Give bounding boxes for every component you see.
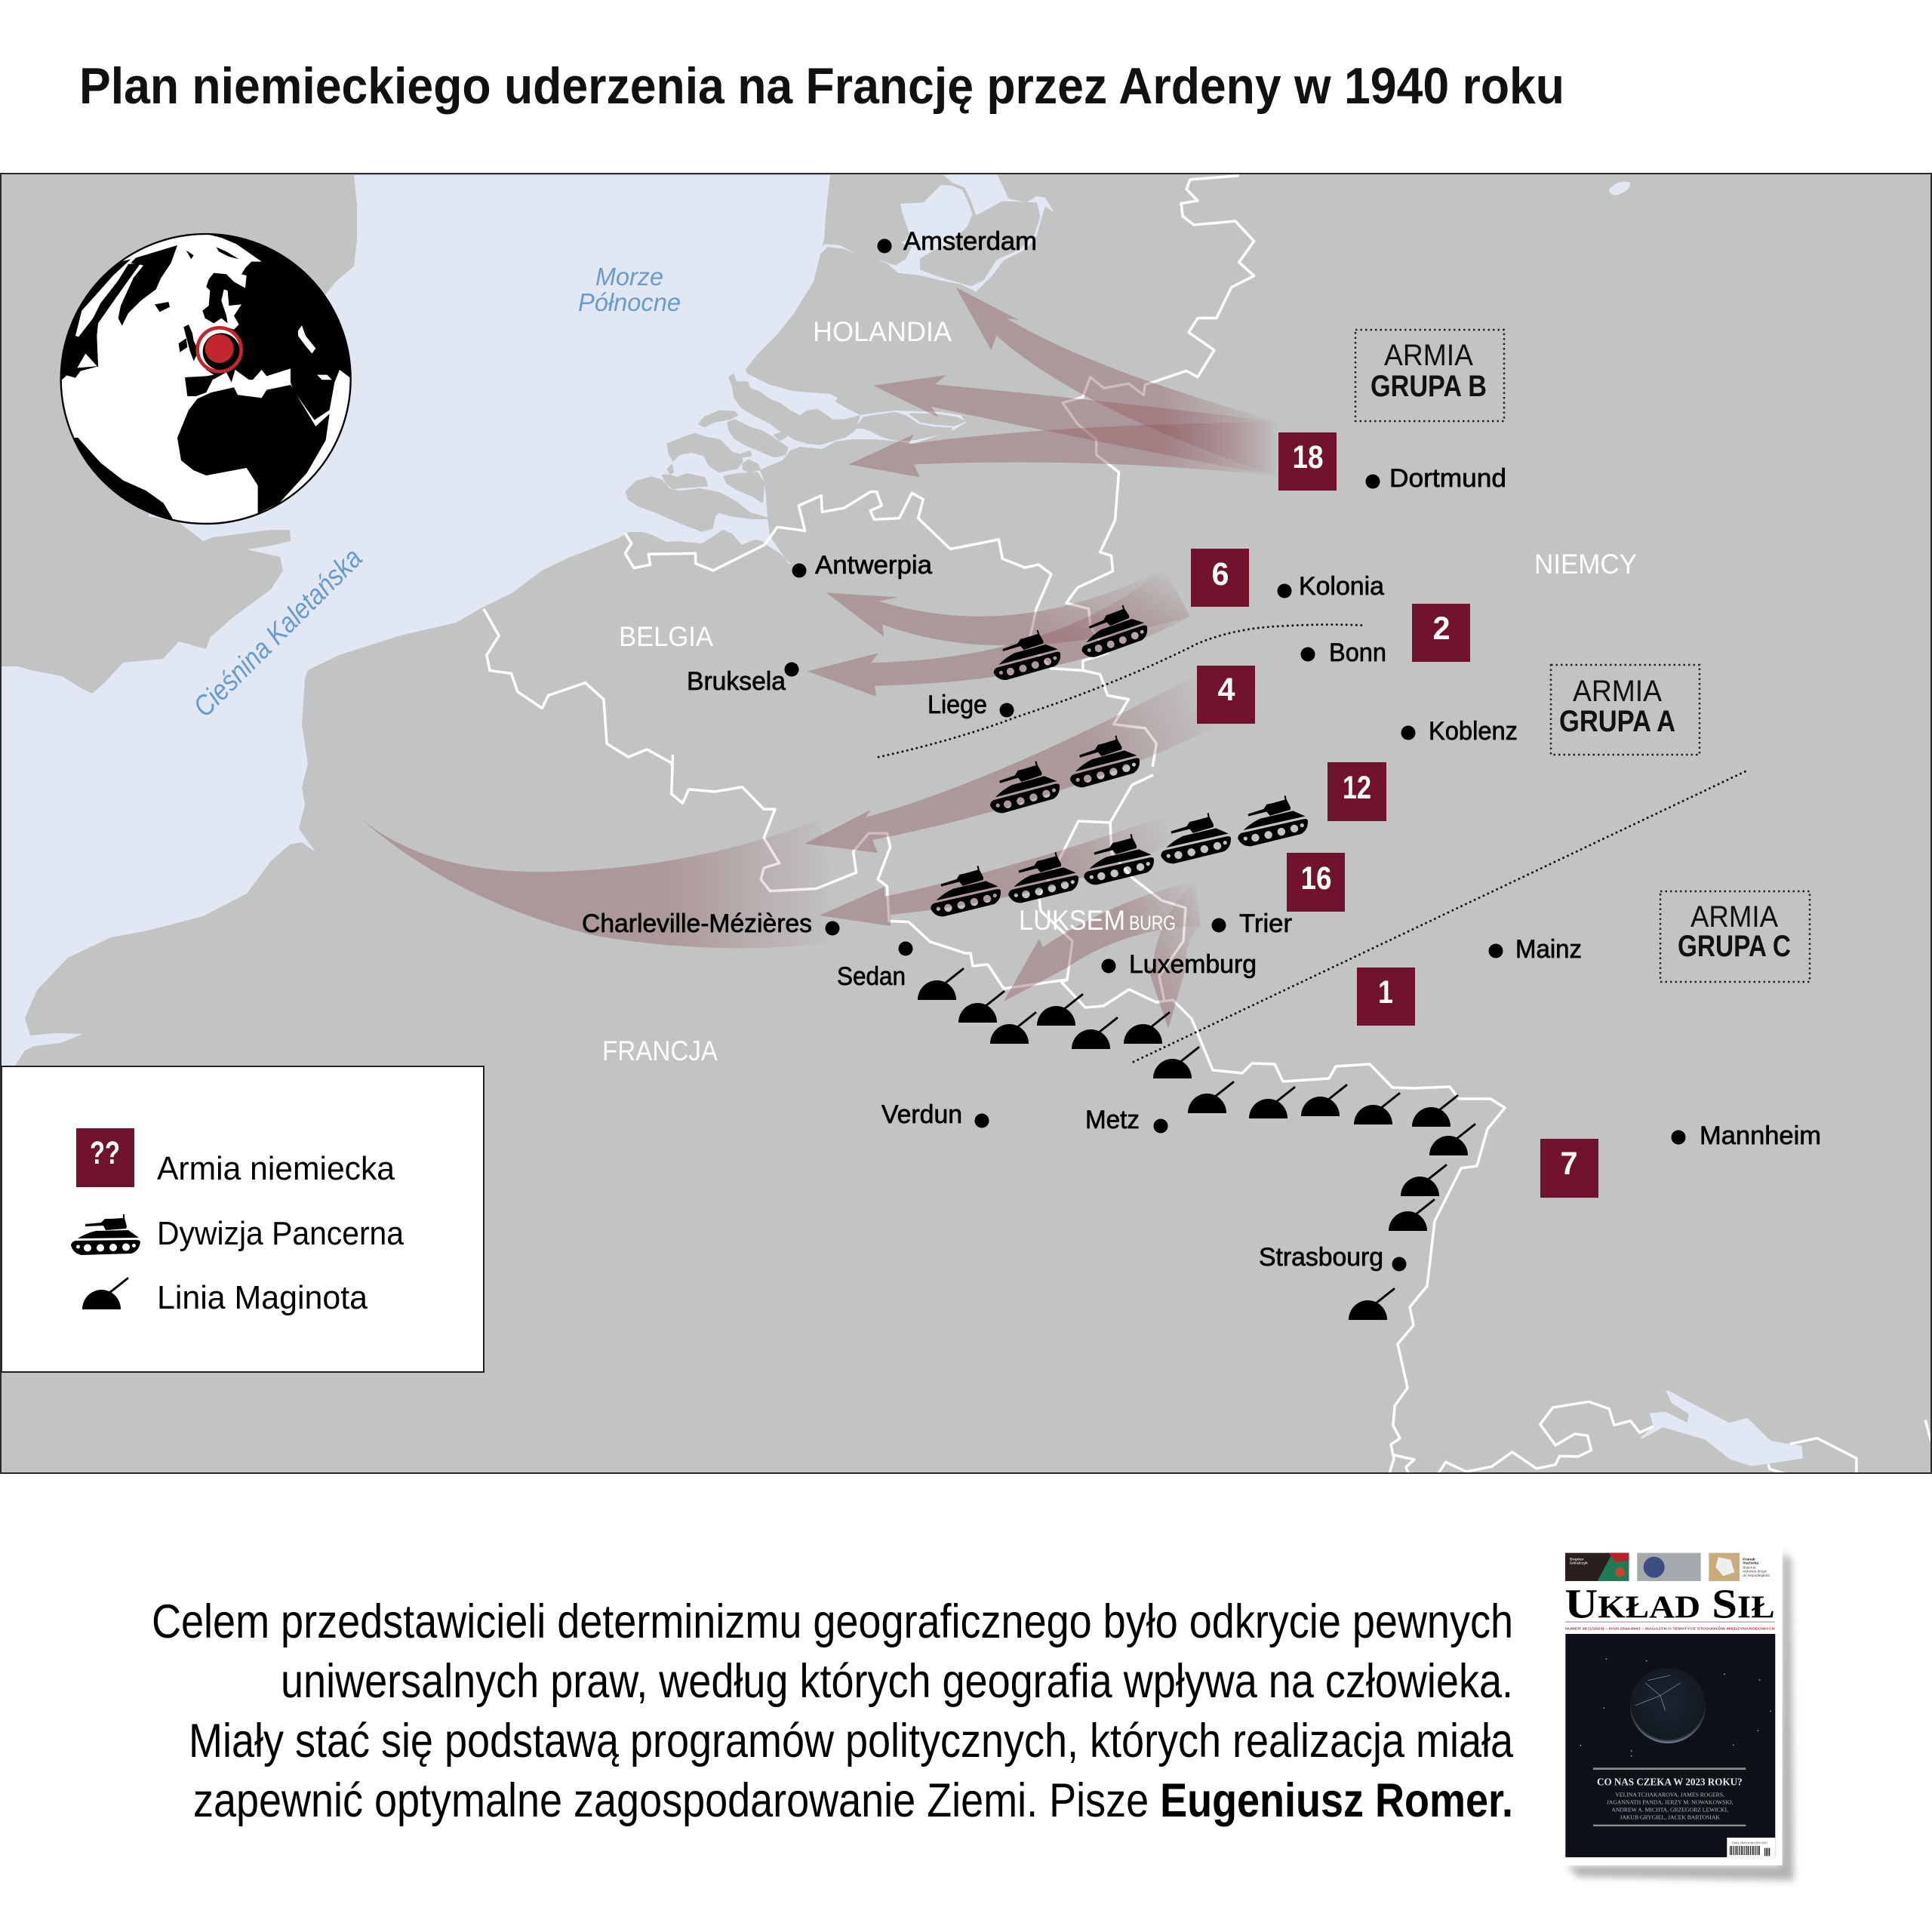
army group B label (1355, 330, 1504, 421)
arrow: 12th army (820, 822, 1161, 926)
city markers and labels: Charleville-Mézières (582, 909, 812, 938)
army number squares: 7 (1561, 1146, 1577, 1182)
army group C label: ARMIA (1690, 900, 1778, 934)
arrow: 16th army south (1147, 894, 1200, 1028)
arrows: 18th army (848, 288, 1280, 477)
sea labels: Cieśnina Kaletańska (188, 543, 368, 723)
cover issue line: NUMER 38 (1/2023) – ISSN 2544-8943 – MAGAZYN O TEMATYCE STOSUNKÓW MIĘDZYNARODOWYCH (1565, 1625, 1775, 1631)
city markers and labels: Sedan (837, 962, 906, 991)
army group B label: GRUPA B (1371, 370, 1487, 403)
sea labels: Morze (595, 263, 663, 291)
army group C label (1660, 891, 1810, 982)
cover image (1565, 1634, 1775, 1857)
legend labels (157, 1150, 404, 1316)
cover masthead: UKŁAD SIŁ (1564, 1580, 1775, 1626)
city markers and labels: Dortmund (1389, 464, 1506, 493)
city markers and labels: Luxemburg (1129, 950, 1257, 979)
dotted line: army group A/C boundary (1134, 771, 1746, 1062)
arrows: 6th army (808, 568, 1190, 697)
city markers and labels: Trier (1239, 909, 1292, 938)
tanks (924, 600, 1311, 918)
army number squares: 1 (1378, 974, 1393, 1011)
sea labels: Północne (578, 288, 681, 316)
cover top teasers: Bogdan (1570, 1557, 1584, 1561)
dotted line: army group A/B boundary (878, 625, 1364, 757)
cover top teasers: do niepodległości (1743, 1574, 1770, 1577)
country labels: LUKSEM (1019, 905, 1125, 936)
cover page (1560, 1546, 1783, 1866)
legend: army square: ?? (90, 1135, 120, 1171)
body text: zapewnić optymalne zagospodarowanie Ziemi. Pisze Eugeniusz Romer. (193, 1774, 1513, 1827)
army number squares (1191, 432, 1598, 1198)
army group A label (1551, 665, 1700, 755)
cover top teasers: Franak (1743, 1557, 1755, 1561)
city markers and labels: Strasbourg (1259, 1243, 1383, 1272)
title: Plan niemieckiego uderzenia na Francję przez Ardeny w 1940 roku (79, 57, 1564, 115)
cover image: JAKUB GRYGIEL, JACEK BARTOSIAK (1620, 1814, 1720, 1820)
cover image: JAGANNATH PANDA, JERZY M. NOWAKOWSKI, (1607, 1799, 1734, 1806)
panel: map (0, 174, 1932, 1474)
water: Amsterdam lake and inland waters (815, 175, 1054, 292)
Maginot Line domes (918, 969, 1475, 1320)
sea labels (188, 263, 681, 723)
arrow: 16th army west (1004, 881, 1201, 1001)
city markers and labels: Amsterdam (903, 227, 1037, 256)
arrow: long sweep to the Channel (353, 812, 844, 948)
body text: Miały stać się podstawą programów politycznych, których realizacja miała (189, 1715, 1514, 1767)
city markers and labels: Liege (928, 691, 987, 719)
army number squares: 6 (1212, 556, 1229, 592)
cover image: CO NAS CZEKA W 2023 ROKU? (1597, 1776, 1743, 1787)
city markers and labels: Bruksela (687, 667, 786, 696)
city markers and labels: Metz (1085, 1106, 1140, 1134)
cover shadow (1567, 1552, 1794, 1881)
body text: Celem przedstawicieli determinizmu geograficznego było odkrycie pewnych (152, 1595, 1513, 1648)
legend: army square (76, 1128, 134, 1187)
country labels (602, 316, 1637, 1066)
city markers and labels (582, 227, 1821, 1272)
borders (484, 176, 1932, 1474)
body text (152, 1595, 1514, 1827)
map frame (1, 174, 1931, 1473)
army group B label: ARMIA (1384, 339, 1473, 372)
cover top teasers: Białoruś (1743, 1565, 1756, 1569)
cover barcode: Cena 20zł (w tym 8% VAT) (1732, 1841, 1768, 1844)
magazine cover (1560, 1546, 1794, 1881)
country labels: BELGIA (619, 621, 713, 652)
delta islands (626, 375, 964, 531)
cover barcode (1727, 1838, 1775, 1857)
legend labels: Dywizja Pancerna (157, 1215, 404, 1252)
army group A label: ARMIA (1573, 675, 1662, 708)
panel: legend (2, 1066, 484, 1372)
city markers and labels: Mainz (1515, 935, 1582, 964)
army number squares: 4 (1218, 672, 1235, 708)
water: Lake Constance (1642, 1391, 1801, 1466)
country labels: FRANCJA (602, 1035, 718, 1066)
city markers and labels: Koblenz (1429, 717, 1518, 746)
arrow: 4th army and 2nd army (804, 676, 1213, 853)
cover image: VELINA TCHAKAROVA, JAMES ROGERS, (1615, 1792, 1724, 1798)
cover image: ANDREW A. MICHTA, GRZEGORZ LEWICKI, (1611, 1807, 1728, 1814)
army number squares: 12 (1343, 770, 1371, 806)
legend: armoured division icon (71, 1214, 140, 1255)
body text: uniwersalnych praw, według których geografia wpływa na człowieka. (281, 1655, 1513, 1708)
country labels: HOLANDIA (813, 316, 952, 347)
city markers and labels: Kolonia (1299, 572, 1384, 601)
army group C label: GRUPA C (1678, 930, 1791, 963)
city markers and labels: Bonn (1329, 638, 1386, 667)
army number squares: 2 (1432, 611, 1451, 647)
legend: Maginot icon (82, 1278, 128, 1309)
city markers and labels: Antwerpia (815, 551, 932, 580)
city markers and labels: Mannheim (1700, 1121, 1821, 1150)
water: small lake north-east (1609, 182, 1630, 195)
legend labels: Armia niemiecka (157, 1150, 395, 1187)
legend labels: Linia Maginota (157, 1279, 368, 1316)
army number squares: 16 (1301, 860, 1331, 897)
water: North Sea and Channel (0, 175, 966, 1066)
globe locator (60, 232, 352, 525)
cover top teasers: Góralczyk (1570, 1561, 1588, 1566)
cover top teasers: Viačorka (1743, 1561, 1758, 1566)
cover top teasers: wyboista droga (1743, 1570, 1767, 1574)
country labels: BURG (1129, 912, 1176, 934)
cover top teasers (1565, 1553, 1770, 1581)
country labels: NIEMCY (1534, 549, 1637, 580)
army group A label: GRUPA A (1559, 705, 1675, 738)
city markers and labels: Verdun (881, 1100, 962, 1129)
army number squares: 18 (1292, 439, 1324, 475)
